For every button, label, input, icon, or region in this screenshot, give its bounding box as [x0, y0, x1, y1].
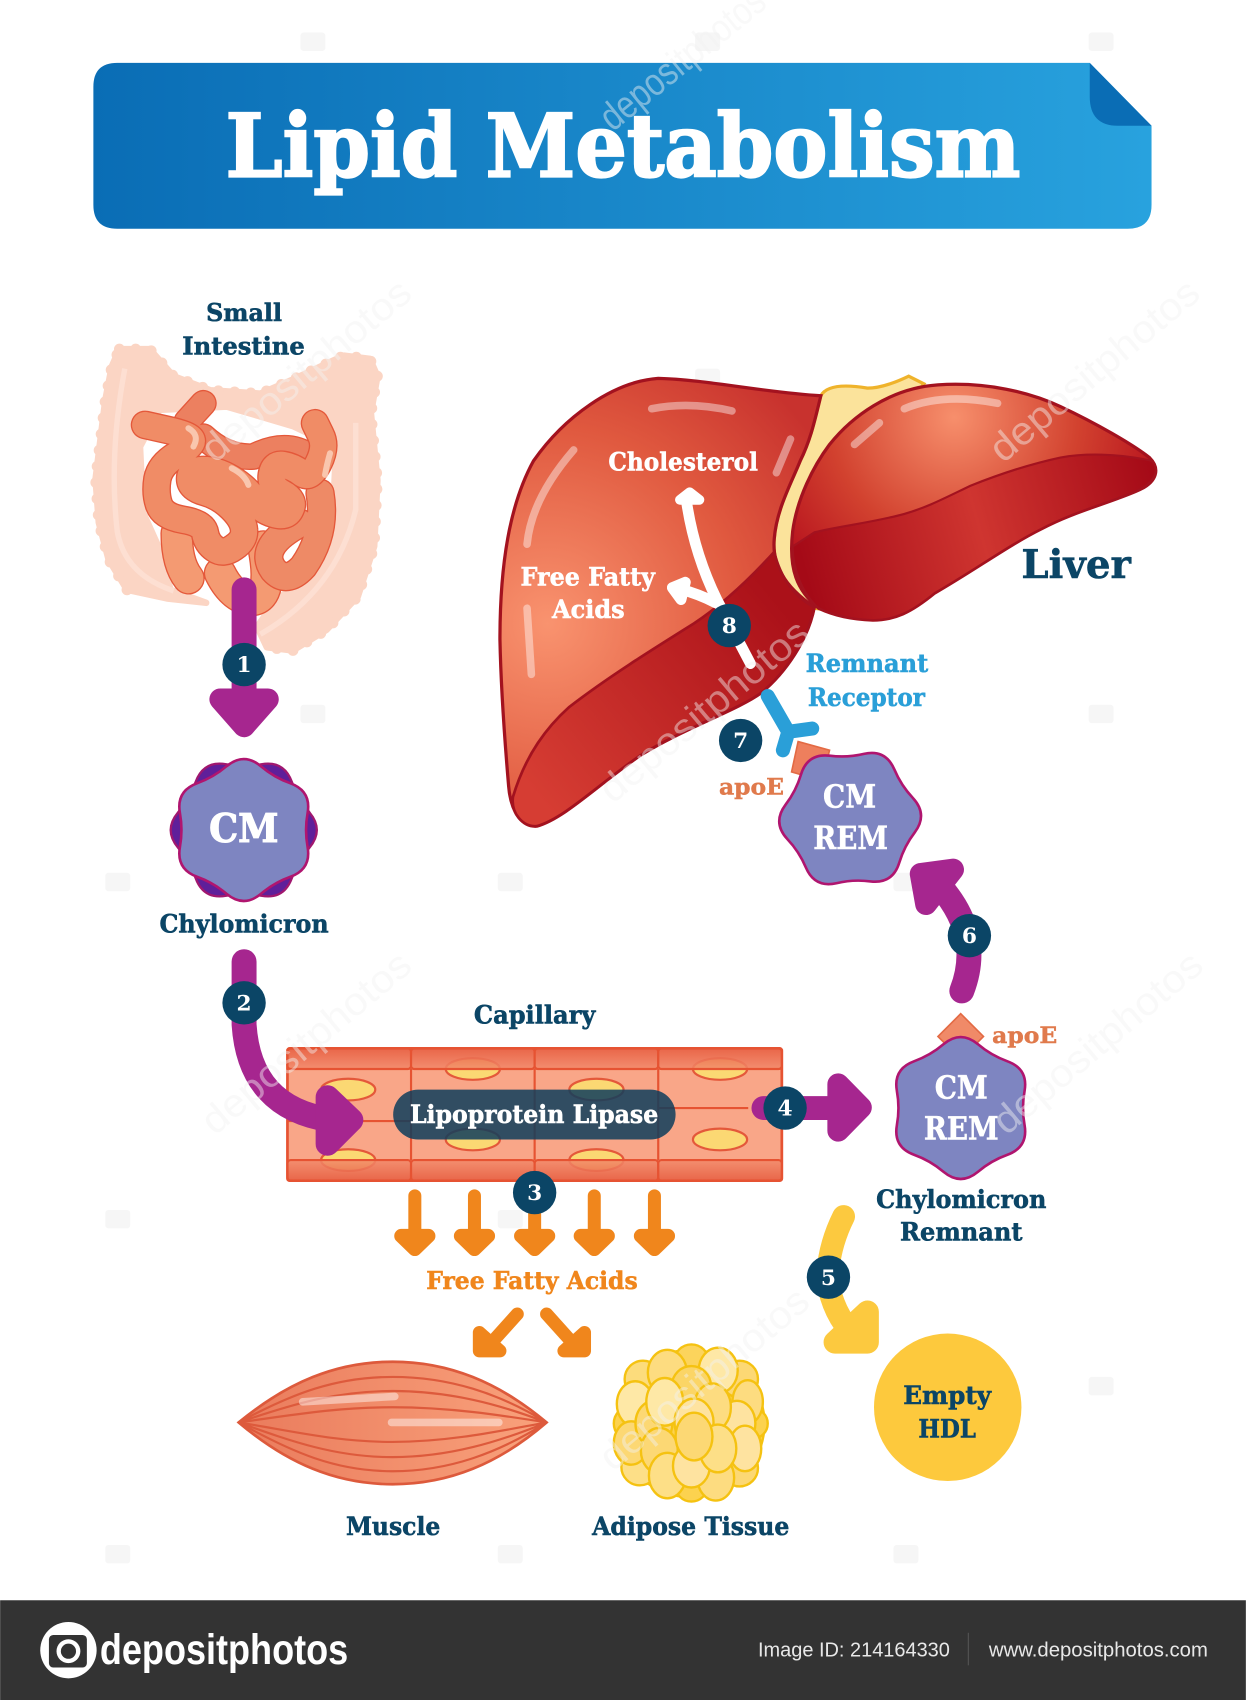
right lobe underside	[793, 455, 1156, 620]
label: liver: Liver	[1021, 542, 1131, 588]
panel: small intestine	[96, 299, 377, 651]
footer bar	[0, 1600, 1246, 1700]
arrow: to muscle	[479, 1314, 517, 1351]
chylomicron particle	[171, 759, 317, 901]
remnant text: REM	[813, 820, 888, 857]
label: muscle: Muscle	[346, 1512, 440, 1541]
apoE diamond	[938, 1014, 983, 1059]
apoE label lower: apoE	[992, 1023, 1057, 1049]
gallbladder	[774, 376, 924, 611]
capillary body	[287, 1048, 782, 1181]
title text: Lipid Metabolism	[226, 97, 1020, 198]
liver	[500, 376, 1156, 826]
label: free fatty acids in liver: Free Fatty	[521, 562, 656, 591]
watermark: diagonal text: depositphotos	[193, 271, 420, 471]
step number 1: 1	[237, 653, 252, 678]
remnant text: CM	[823, 779, 876, 816]
CM remnant particle, upper	[719, 742, 924, 887]
arrow: to adipose tissue	[547, 1314, 585, 1351]
title banner	[93, 63, 1152, 229]
step number 4: 4	[778, 1097, 793, 1122]
empty HDL	[874, 1334, 1021, 1481]
CM text: CM	[209, 806, 278, 852]
liver highlights	[527, 399, 998, 674]
remnant text: CM	[935, 1069, 988, 1106]
right lobe	[792, 384, 1156, 620]
step number 3: 3	[527, 1181, 542, 1206]
arrow 5: to empty HDL	[827, 1216, 867, 1342]
adipose tissue	[614, 1344, 768, 1502]
left lobe	[500, 378, 821, 826]
label: small intestine: Small	[206, 299, 282, 327]
arrow 6: remnant to liver	[921, 870, 969, 991]
label: chylomicron remnant: Chylomicron	[876, 1185, 1046, 1214]
watermark: diagonal text: depositphotos	[591, 611, 818, 811]
label: small intestine: Intestine	[182, 333, 305, 361]
label: free fatty acids: Free Fatty Acids	[426, 1267, 638, 1295]
step number 2: 2	[237, 991, 252, 1016]
label: chylomicron remnant: Remnant	[900, 1217, 1023, 1246]
banner corner fold	[1090, 63, 1152, 126]
arrow 8: white pathway arrows	[672, 492, 750, 664]
step number 7	[719, 719, 762, 762]
brand name: depositphotos	[100, 1626, 348, 1673]
step number 8: 8	[722, 614, 737, 639]
image id: Image ID: 214164330	[758, 1639, 950, 1662]
arrow 4: capillary to CM remnant	[763, 1084, 861, 1131]
step number 8	[708, 604, 751, 647]
small intestine coils	[145, 403, 330, 600]
icon: depositphotos logo	[40, 1622, 97, 1678]
watermark: diagonal text	[193, 0, 1211, 1479]
watermark: diagonal text: depositphotos	[984, 943, 1211, 1143]
apoE square	[792, 742, 830, 781]
muscle	[239, 1362, 547, 1484]
empty HDL: HDL	[918, 1415, 976, 1444]
step number 3	[513, 1171, 556, 1214]
website url: www.depositphotos.com	[988, 1639, 1208, 1662]
watermark: diagonal text: depositphotos	[591, 1279, 818, 1479]
large intestine	[96, 349, 377, 651]
label: remnant receptor: Remnant	[806, 649, 929, 678]
empty HDL: Empty	[903, 1381, 993, 1410]
watermark: faint repeated marks	[105, 33, 1114, 1563]
bottom wall segments	[287, 1160, 782, 1181]
watermark: diagonal text: depositphotos	[981, 271, 1208, 471]
lipoprotein lipase pill	[393, 1090, 676, 1139]
CM remnant particle, lower	[896, 1014, 1057, 1179]
top wall segments	[287, 1048, 782, 1069]
apoE label upper: apoE	[719, 775, 784, 801]
nuclei	[321, 1058, 747, 1171]
label: cholesterol: Cholesterol	[608, 448, 758, 477]
remnant shell	[896, 1037, 1025, 1179]
left lobe dark underside	[513, 552, 814, 826]
arrow 1: intestine to chylomicron	[220, 590, 268, 726]
step number 5	[807, 1255, 850, 1299]
capillary label: Capillary	[474, 1000, 597, 1029]
step number 4	[763, 1086, 807, 1130]
dark outer shell	[171, 764, 317, 896]
step number 1	[222, 643, 266, 686]
arrow 2: chylomicron to capillary	[244, 962, 351, 1144]
remnant text: REM	[924, 1110, 999, 1147]
label: free fatty acids in liver: Acids	[551, 595, 625, 624]
label: chylomicron: Chylomicron	[160, 909, 329, 938]
watermark: diagonal text: depositphotos	[193, 943, 420, 1143]
icon: remnant receptor Y	[768, 696, 812, 750]
label: remnant receptor: Receptor	[808, 683, 926, 712]
arrows 3: free fatty acids released	[401, 1196, 668, 1249]
step number 5: 5	[821, 1266, 836, 1291]
capillary	[287, 1000, 782, 1181]
front shell	[179, 759, 308, 901]
label: adipose tissue: Adipose Tissue	[591, 1512, 789, 1541]
step number 7: 7	[733, 729, 748, 754]
step number 2	[222, 981, 266, 1025]
step number 6: 6	[962, 924, 977, 949]
lipoprotein lipase pill: Lipoprotein Lipase	[410, 1100, 658, 1129]
remnant shell	[776, 750, 924, 887]
step number 6	[948, 914, 991, 957]
